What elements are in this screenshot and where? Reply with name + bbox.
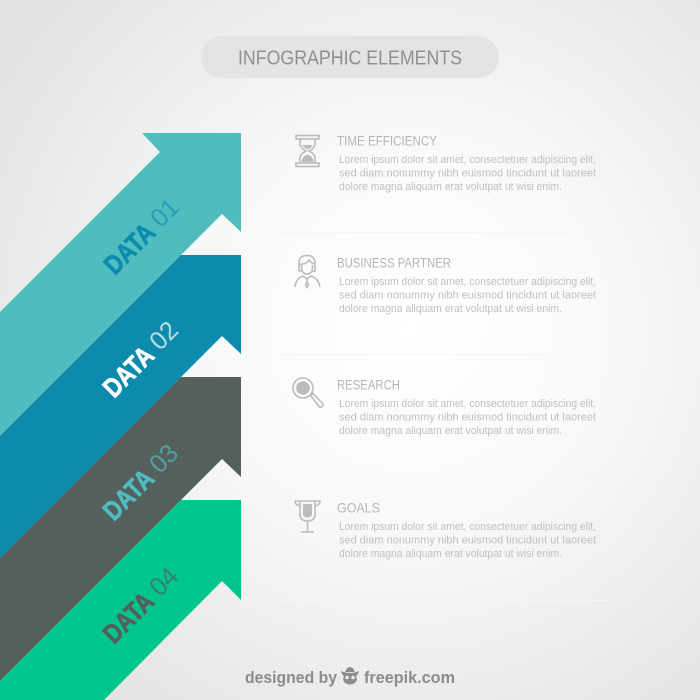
footer credit: freepik.com: [364, 669, 455, 687]
text block: dolore magna aliquam erat volutpat ut wisi enim.: [339, 548, 562, 560]
label: data 03: [96, 438, 185, 526]
icon: magnifier: [293, 378, 323, 408]
text block: dolore magna aliquam erat volutpat ut wisi enim.: [339, 181, 562, 193]
footer credit: designed by: [245, 669, 338, 687]
arrow 2: data 02: [0, 255, 241, 558]
label: data 04: DATA: [97, 586, 160, 649]
panel: business partner: [295, 254, 596, 315]
heading: TIME EFFICIENCY: [337, 132, 438, 148]
panel: goals: [295, 500, 596, 560]
icon: person: [295, 256, 320, 288]
label: data 01: [97, 192, 186, 280]
heading: BUSINESS PARTNER: [337, 254, 451, 270]
title: [201, 36, 499, 78]
text block: [339, 398, 596, 437]
text block: Lorem ipsum dolor sit amet, consectetuer adipiscing elit,: [339, 154, 596, 166]
label: data 03: 03: [143, 438, 184, 479]
text block: dolore magna aliquam erat volutpat ut wisi enim.: [339, 425, 562, 437]
text block: Lorem ipsum dolor sit amet, consectetuer adipiscing elit,: [339, 276, 596, 288]
text block: sed diam nonummy nibh euismod tincidunt ut laoreet: [339, 168, 596, 180]
arrow 1: data 01: [0, 133, 241, 436]
icon: freepik logo: [341, 667, 359, 684]
arrow 4: data 04: [0, 500, 241, 700]
label: data 02: 02: [143, 315, 184, 356]
text block: Lorem ipsum dolor sit amet, consectetuer adipiscing elit,: [339, 521, 596, 533]
text block: Lorem ipsum dolor sit amet, consectetuer adipiscing elit,: [339, 398, 596, 410]
icon: trophy: [295, 501, 320, 532]
label: data 04: 04: [143, 561, 184, 602]
text block: sed diam nonummy nibh euismod tincidunt ut laoreet: [339, 534, 596, 546]
heading: GOALS: [337, 500, 380, 516]
icon: hourglass: [296, 136, 319, 166]
arrow 3: data 03: [0, 377, 241, 681]
text block: [339, 521, 596, 560]
label: data 02: DATA: [97, 340, 160, 403]
panel: research: [293, 376, 596, 437]
panel: time efficiency: [296, 132, 596, 193]
label: data 04: [96, 561, 185, 649]
heading: RESEARCH: [337, 376, 400, 392]
label: data 01: DATA: [98, 217, 161, 280]
text block: sed diam nonummy nibh euismod tincidunt ut laoreet: [339, 412, 596, 424]
footer credit: [245, 667, 455, 687]
text block: dolore magna aliquam erat volutpat ut wisi enim.: [339, 303, 562, 315]
label: data 03: DATA: [97, 463, 160, 526]
text block: [339, 276, 596, 315]
label: data 02: [96, 315, 185, 403]
text block: sed diam nonummy nibh euismod tincidunt ut laoreet: [339, 290, 596, 302]
title: INFOGRAPHIC ELEMENTS: [238, 46, 462, 70]
label: data 01: 01: [144, 192, 185, 233]
text block: [339, 154, 596, 193]
